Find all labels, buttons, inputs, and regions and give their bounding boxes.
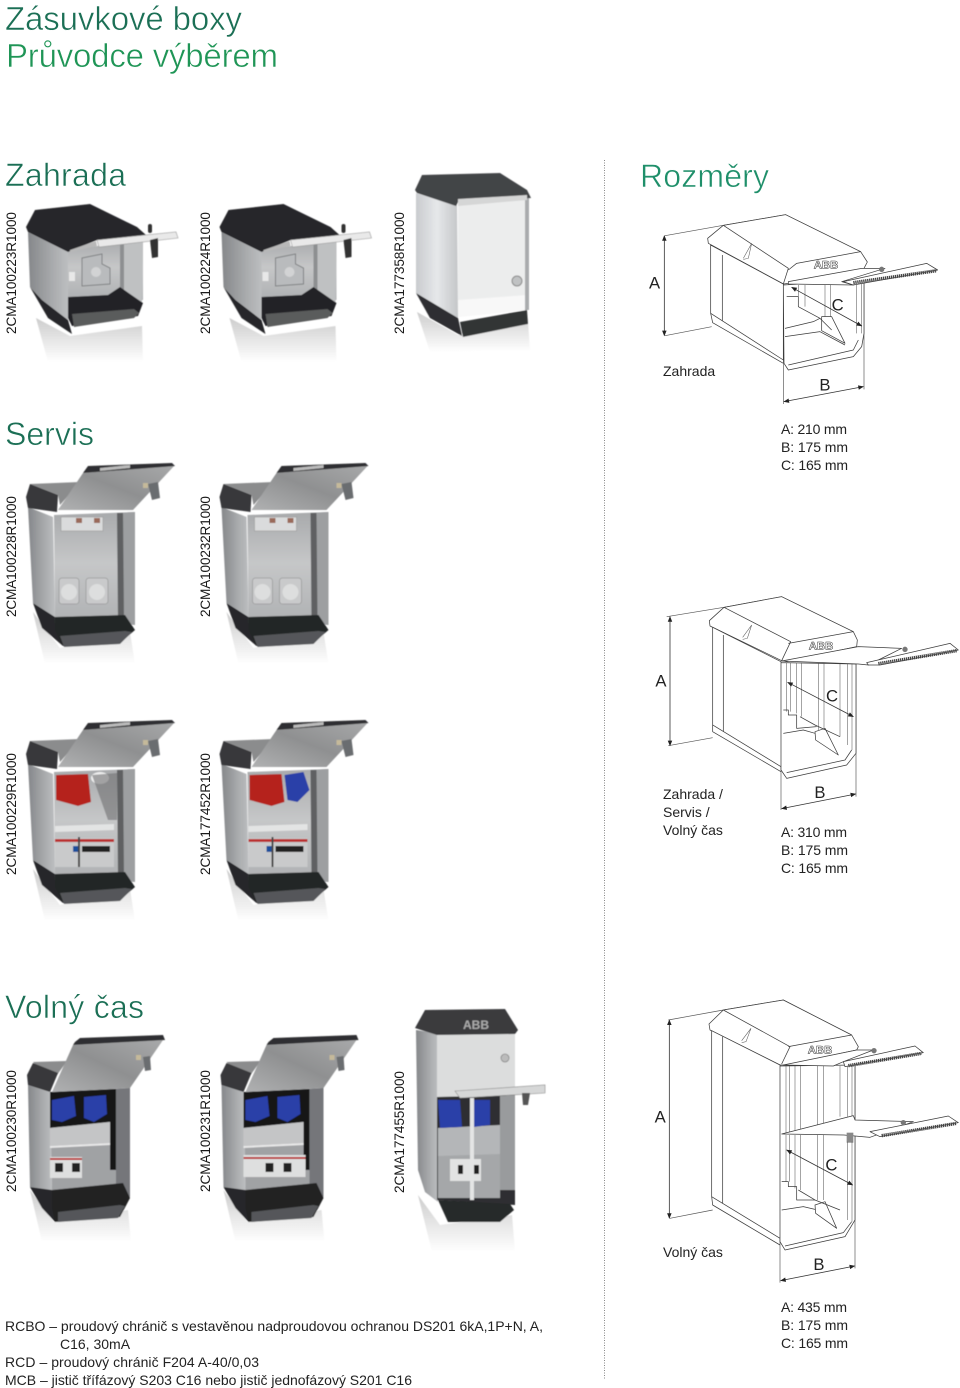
dimensions: Volný čas: A: 435 mm	[781, 1299, 847, 1315]
title: Zásuvkové boxy	[5, 0, 242, 37]
diagram: Volný čas dimensions: C	[825, 1156, 837, 1175]
dimensions: middle: B: 175 mm	[781, 842, 848, 858]
diagram: Zahrada dimensions: B	[819, 376, 830, 395]
product: 2CMA177358R1000: 2CMA177358R1000	[392, 212, 407, 334]
dimensions: Zahrada: B: 175 mm	[781, 439, 848, 455]
heading: Zahrada: Zahrada	[5, 157, 126, 193]
dimensions: Volný čas	[781, 1299, 848, 1351]
title: Průvodce výběrem	[6, 37, 278, 74]
heading: Servis: Servis	[5, 416, 94, 452]
product: 2CMA100231R1000	[198, 1035, 358, 1242]
product: 2CMA100230R1000: 2CMA100230R1000	[4, 1070, 19, 1192]
product: 2CMA177452R1000: 2CMA177452R1000	[198, 753, 213, 875]
product: 2CMA100232R1000	[198, 463, 368, 664]
product: 2CMA100231R1000: 2CMA100231R1000	[198, 1070, 213, 1192]
diagram: Volný čas dimensions: A	[655, 1107, 667, 1126]
product: 2CMA100230R1000	[4, 1035, 165, 1242]
product: 2CMA100232R1000: 2CMA100232R1000	[198, 496, 213, 617]
product: 2CMA100224R1000: 2CMA100224R1000	[198, 212, 213, 334]
footnotes: MCB – jistič třífázový S203 C16 nebo jistič jednofázový S201 C16	[5, 1372, 412, 1388]
dimensions: middle	[781, 824, 848, 876]
product: 2CMA177452R1000	[198, 720, 368, 921]
heading: Rozměry: Rozměry	[640, 158, 769, 194]
diagram: Zahrada / Servis / Volný čas dimensions: C	[826, 687, 838, 706]
dimensions: Volný čas: C: 165 mm	[781, 1335, 848, 1351]
product: 2CMA100229R1000	[4, 720, 175, 921]
diagram: Zahrada / Servis / Volný čas dimensions	[655, 597, 958, 810]
dimensions: Zahrada	[781, 421, 848, 473]
title	[5, 0, 278, 74]
diagram: Volný čas dimensions: ABB	[808, 1044, 832, 1056]
label: Zahrada / Servis / Volný čas: Servis /	[663, 804, 710, 820]
footnotes: RCD – proudový chránič F204 A-40/0,03	[5, 1354, 259, 1370]
product: 2CMA100228R1000	[4, 463, 175, 664]
label: Volný čas: Volný čas	[663, 1244, 723, 1260]
dimensions: Volný čas: B: 175 mm	[781, 1317, 848, 1333]
product: 2CMA177455R1000: 2CMA177455R1000	[392, 1071, 407, 1193]
footnotes: C16, 30mA	[60, 1336, 131, 1352]
product: 2CMA100229R1000: 2CMA100229R1000	[4, 753, 19, 875]
diagram: Zahrada dimensions: A	[649, 274, 661, 293]
footnotes	[5, 1318, 543, 1388]
dimensions: middle: C: 165 mm	[781, 860, 848, 876]
heading: Volný čas: Volný čas	[5, 989, 144, 1025]
label: Zahrada / Servis / Volný čas	[663, 786, 723, 838]
product: 2CMA177358R1000	[392, 173, 531, 352]
label: Zahrada / Servis / Volný čas: Zahrada /	[663, 786, 723, 802]
product: 2CMA177455R1000	[392, 1009, 545, 1252]
diagram: Zahrada / Servis / Volný čas dimensions: A	[655, 672, 667, 691]
diagram: Zahrada dimensions: ABB	[814, 259, 838, 271]
diagram: Zahrada / Servis / Volný čas dimensions: B	[814, 783, 825, 802]
label: Zahrada: Zahrada	[663, 363, 715, 379]
dimensions: Zahrada: A: 210 mm	[781, 421, 847, 437]
dimensions: middle: A: 310 mm	[781, 824, 847, 840]
dimensions: Zahrada: C: 165 mm	[781, 457, 848, 473]
product: 2CMA100228R1000: 2CMA100228R1000	[4, 496, 19, 617]
diagram: Volný čas dimensions	[655, 1000, 958, 1283]
diagram: Zahrada dimensions	[649, 215, 938, 404]
product: 2CMA100223R1000	[4, 204, 178, 362]
label: Zahrada / Servis / Volný čas: Volný čas	[663, 822, 723, 838]
product: 2CMA100224R1000	[198, 204, 372, 362]
footnotes: RCBO – proudový chránič s vestavěnou nadproudovou ochranou DS201 6kA,1P+N, A,	[5, 1318, 543, 1334]
product: 2CMA177455R1000: ABB	[463, 1018, 489, 1032]
product: 2CMA100223R1000: 2CMA100223R1000	[4, 212, 19, 334]
diagram: Zahrada / Servis / Volný čas dimensions: ABB	[809, 640, 833, 652]
diagram: Volný čas dimensions: B	[813, 1255, 824, 1274]
diagram: Zahrada dimensions: C	[832, 296, 844, 315]
